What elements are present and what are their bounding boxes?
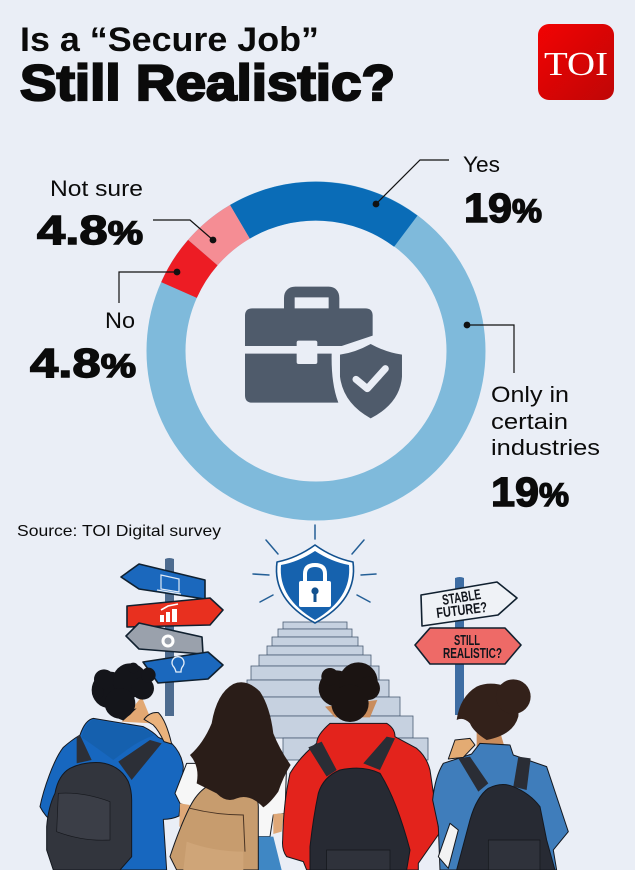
callout: Only in certain industries 19%: 19% [491,469,569,515]
person: girl with long hair and tan backpack [170,682,291,870]
callout: Only in certain industries 19%: Only in [491,382,569,407]
title: Still Realistic? [20,55,395,111]
signpost: right with question signs [415,577,521,715]
person: girl in denim jacket with hair bun [433,679,568,870]
callout: Only in certain industries 19%: industries [491,435,600,460]
signpost: right with question signs: FUTURE? [436,600,488,622]
staircase [247,622,428,760]
callout: Only in certain industries 19% [464,322,600,515]
TOI logo [538,24,614,100]
callout: Not sure 4.8% [37,176,216,253]
TOI logo: TOI [544,46,608,83]
callout: Not sure 4.8%: Not sure [50,176,143,201]
title: Is a “Secure Job” [20,21,319,59]
title [20,21,395,111]
person: boy in red hoodie [282,662,439,870]
callout: No 4.8% [30,269,180,386]
donut chart [166,201,466,501]
callout: Yes 19%: 19% [464,185,542,231]
shield rays [253,525,376,602]
icon: briefcase with shield [245,292,402,418]
icon: light bulb [172,657,184,672]
signpost: left with four arrows [121,558,223,716]
signpost: right with question signs: REALISTIC? [443,646,502,662]
person: boy in blue hoodie [40,663,183,870]
callout: Only in certain industries 19%: certain [491,409,568,434]
callout: Not sure 4.8%: 4.8 % [37,207,143,253]
callout: Yes 19%: Yes [463,152,500,177]
callout: No 4.8%: No [105,308,135,333]
icon: gear [163,636,173,646]
callout: Yes 19% [373,152,542,231]
icon: laptop [157,575,181,594]
icon: growth chart [160,604,178,622]
source note: Source: TOI Digital survey [17,523,221,540]
icon: shield with padlock [276,545,354,623]
signpost: right with question signs: STILL [454,633,480,649]
signpost: right with question signs: STABLE [441,587,482,609]
callout: No 4.8%: 4.8 % [30,340,136,386]
